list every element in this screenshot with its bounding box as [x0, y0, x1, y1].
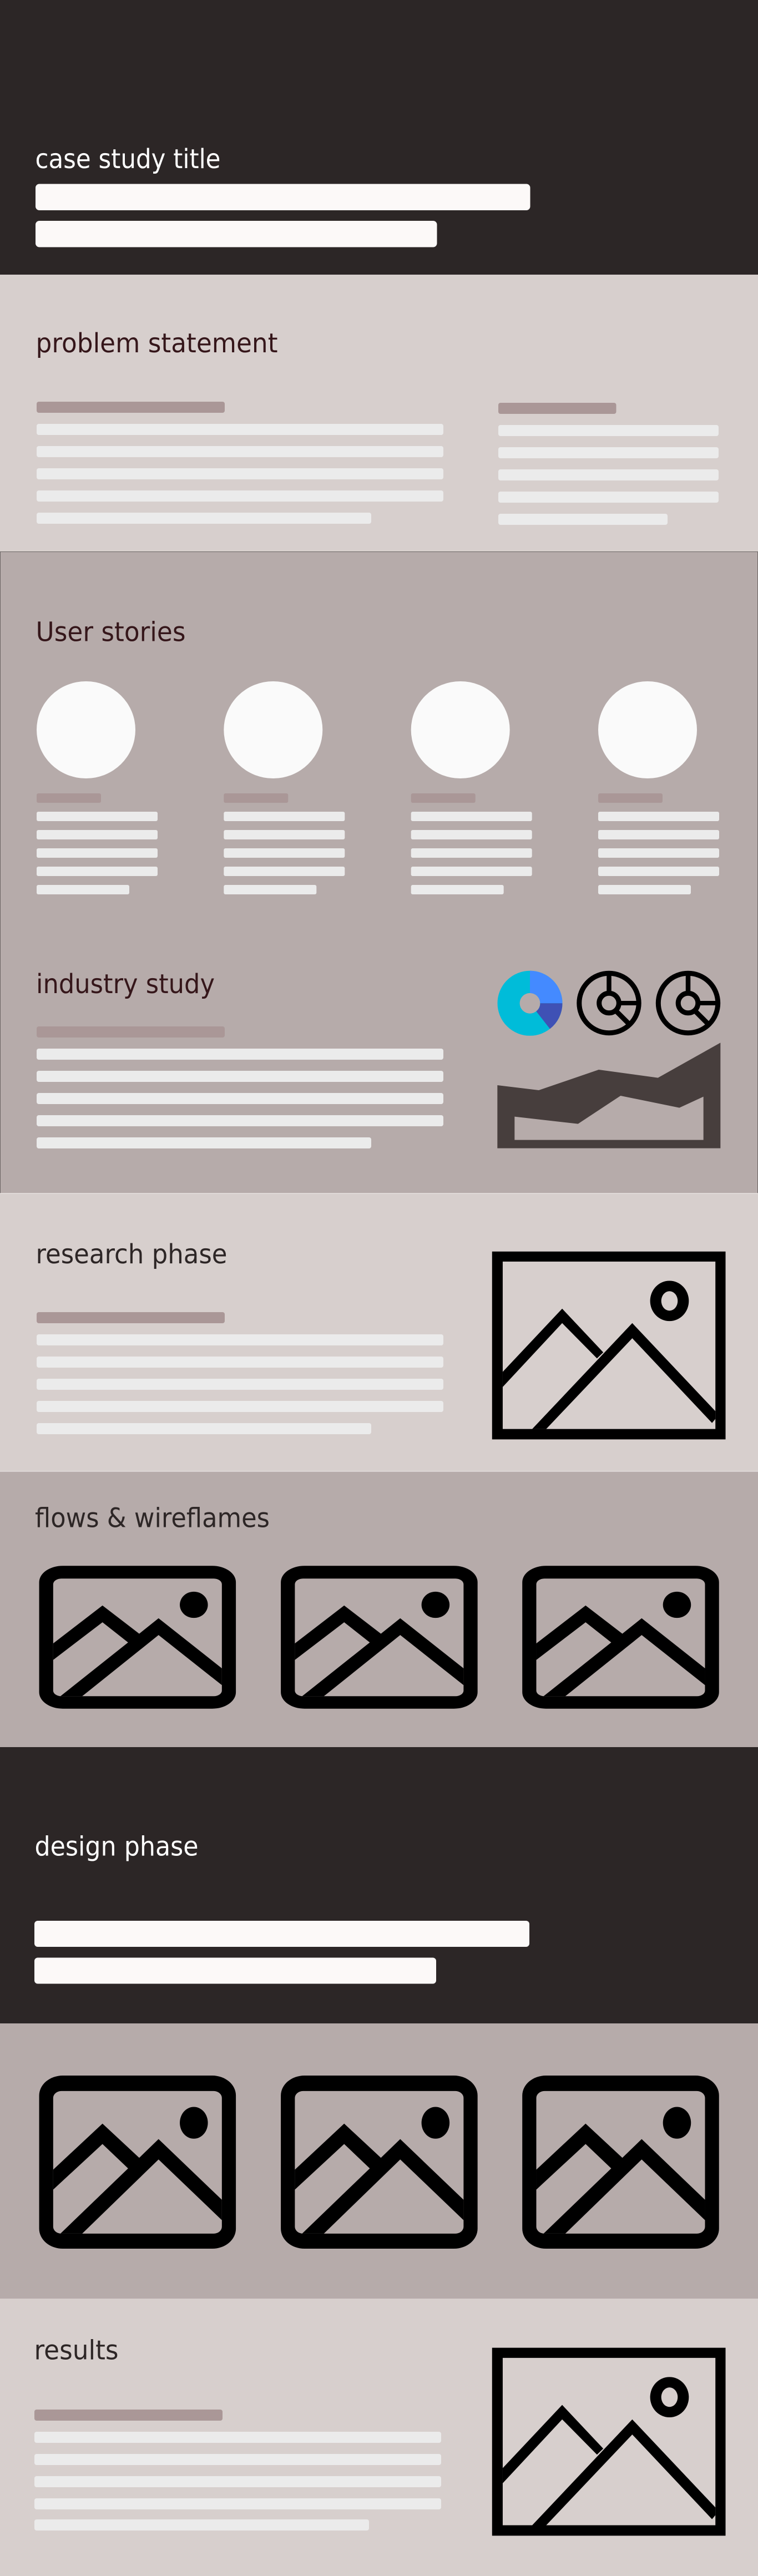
icon: wireframe image 1 [39, 1566, 236, 1709]
icon: wireframe image 2 [281, 1566, 478, 1709]
heading: industry study: industry study [36, 969, 215, 1000]
panel: case study title [0, 0, 758, 275]
icon: image placeholder [492, 2348, 726, 2535]
text block: left column [37, 402, 443, 524]
title placeholder bars [36, 184, 530, 247]
panel: user stories and industry study [0, 551, 758, 1470]
icon: design image 2 [281, 2076, 478, 2249]
icon: donut outline 2 [658, 973, 718, 1033]
user story card 2 [224, 681, 345, 894]
icon: image placeholder [492, 1252, 726, 1439]
icon: donut outline 1 [579, 973, 639, 1033]
panel: design screens [0, 2023, 758, 2299]
panel: problem statement [0, 275, 758, 551]
text block: results [34, 2410, 441, 2531]
chart: coloured donut [509, 971, 563, 1029]
heading: user stories: User stories [36, 617, 185, 648]
text block: research phase [37, 1312, 443, 1434]
icon: wireframe image 3 [522, 1566, 719, 1709]
heading: results: results [34, 2335, 119, 2366]
design phase placeholder bars [34, 1921, 529, 1984]
heading: case study title: case study title [36, 144, 221, 175]
heading: design phase: design phase [34, 1831, 199, 1862]
panel: research phase [0, 1193, 758, 1471]
heading: research phase: research phase [36, 1239, 228, 1270]
text block: right column [498, 403, 719, 525]
user story card 3 [411, 681, 532, 894]
panel: design phase [0, 1747, 758, 2023]
panel: flows and wireframes [0, 1471, 758, 1747]
panel: results [0, 2299, 758, 2576]
icon: design image 3 [522, 2076, 719, 2249]
heading: problem statement: problem statement [36, 328, 277, 359]
user story card 4 [598, 681, 719, 894]
chart: area chart [497, 1042, 720, 1148]
text block: industry study [37, 1026, 443, 1148]
user story card 1 [37, 681, 158, 894]
icon: design image 1 [39, 2076, 236, 2249]
heading: flows and wireframes: flows & wireflames [35, 1502, 270, 1534]
